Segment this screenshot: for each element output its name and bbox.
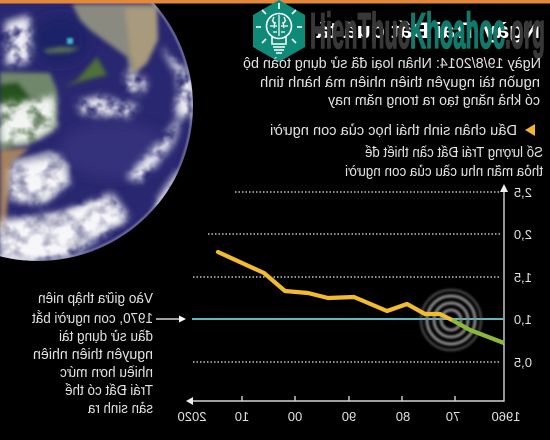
axes <box>190 190 504 401</box>
callout text: 1970, con người bắt <box>32 310 153 327</box>
legend: ecological footprint: Dấu chân sinh thái học của con người <box>270 122 517 139</box>
callout arrow <box>156 316 186 322</box>
line chart <box>178 184 532 424</box>
y axis labels: 1,0 <box>514 312 532 327</box>
x axis labels <box>178 409 520 424</box>
y axis labels: 2,5 <box>514 185 532 200</box>
icon: logo hexagon with light bulb <box>253 0 305 62</box>
y axis labels: 1,5 <box>514 270 532 285</box>
intro text block: có khả năng tạo ra trong năm nay <box>328 92 540 109</box>
intro text block: nguồn tài nguyên thiên nhiên mà hành tinh <box>260 74 540 91</box>
x axis labels: 2020 <box>178 409 206 424</box>
top orange bar <box>0 0 550 4</box>
callout text: sản sinh ra <box>87 401 153 417</box>
x axis labels: 80 <box>396 409 410 424</box>
green footprint line <box>452 320 504 343</box>
intro text block: Ngày 19/8/2014: Nhân loại đã sử dụng toàn bộ <box>243 55 541 72</box>
y axis title <box>345 145 543 180</box>
x axis labels: 10 <box>235 409 249 424</box>
x axis labels: 70 <box>446 409 460 424</box>
y axis labels: 0,5 <box>514 355 532 370</box>
y axis title: thỏa mãn nhu cầu của con người <box>345 164 543 180</box>
y axis labels: 2,0 <box>514 227 532 242</box>
callout text: Vào giữa thập niên <box>38 291 153 307</box>
callout text: Trái Đất có thể <box>65 383 153 399</box>
intro text block <box>243 55 541 109</box>
callout text: đầu sử dụng tài <box>59 329 153 345</box>
yellow footprint line <box>218 252 452 320</box>
reference line at 1.0 <box>192 318 504 320</box>
target rings <box>421 290 481 350</box>
icon: Earth globe <box>0 0 200 270</box>
x axis labels: 1960 <box>492 409 520 424</box>
callout text: nhiều hơn mức <box>60 365 153 381</box>
title: Ngày Trái Đất quá tải <box>310 18 540 43</box>
watermark text: HienThuc <box>310 3 410 59</box>
callout text: nguyên thiên nhiên <box>33 347 153 363</box>
x axis labels: 00 <box>288 409 302 424</box>
y axis labels <box>514 185 532 370</box>
x axis labels: 90 <box>342 409 356 424</box>
callout text <box>32 291 153 417</box>
cloud masses <box>0 15 196 266</box>
y axis title: Số lượng Trái Đất cần thiết để <box>365 145 543 161</box>
